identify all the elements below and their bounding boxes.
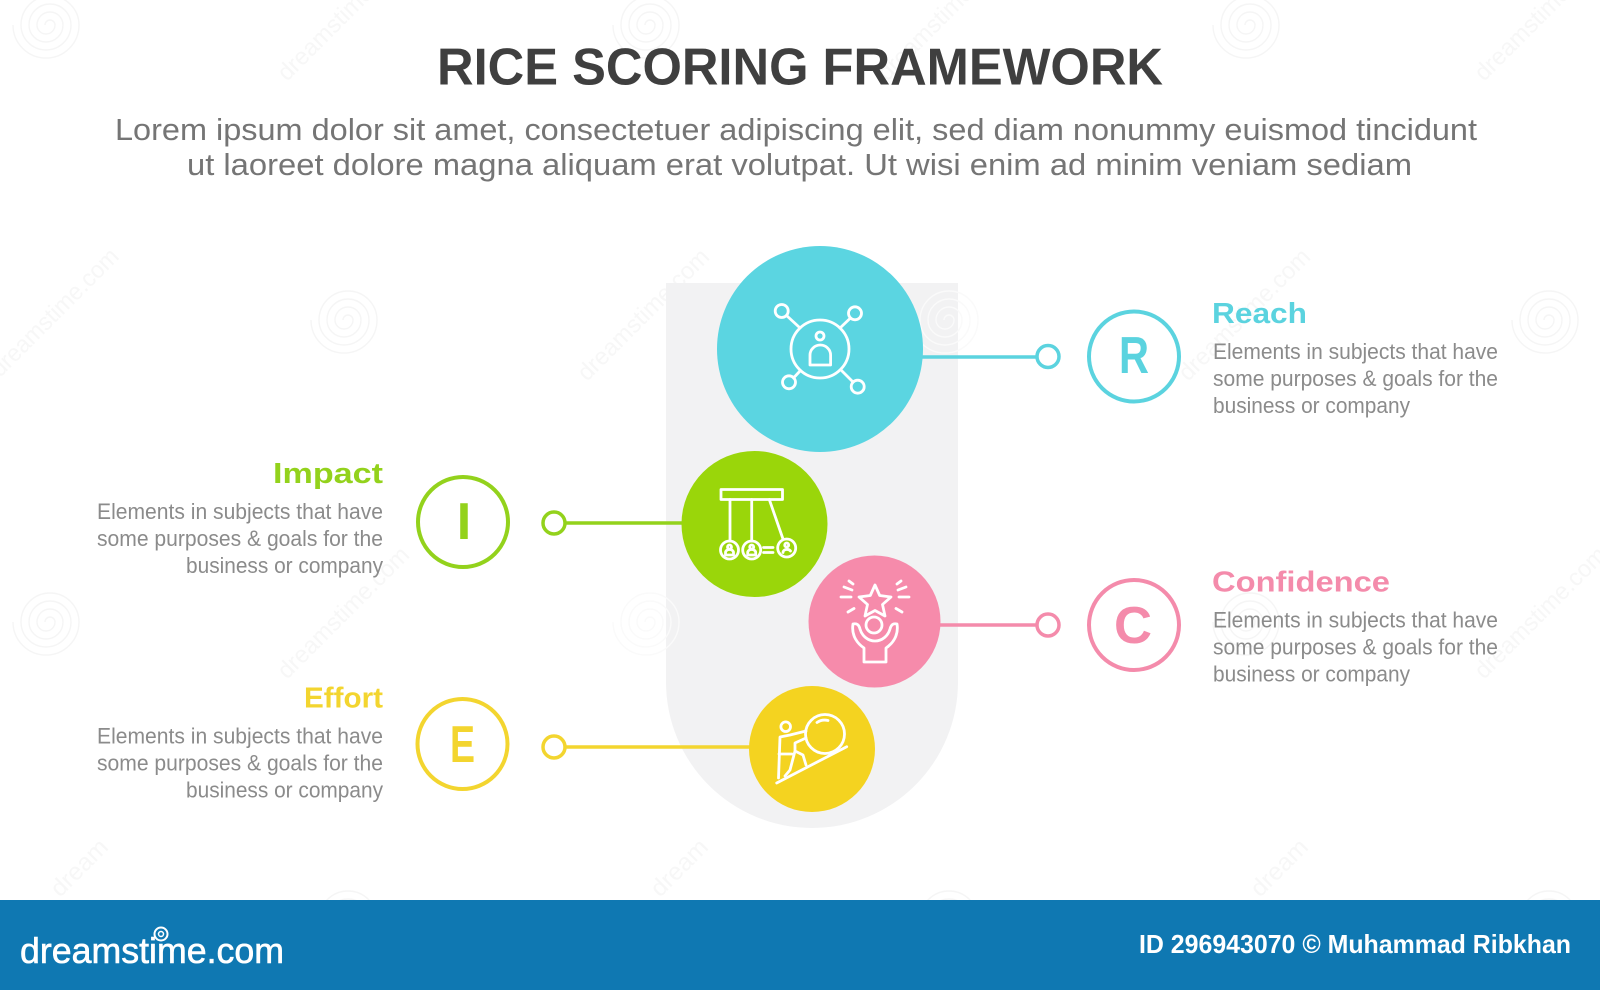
description: Effort: Elements in subjects that have [97,724,383,748]
block: impact [97,458,508,578]
description: Reach: some purposes & goals for the [1213,366,1498,391]
description: Reach: Elements in subjects that have [1213,339,1498,364]
description: Reach [1213,339,1498,418]
subtitle text: Lorem ipsum dolor sit amet, consectetuer adipiscing elit, sed diam nonummy euismod tincidunt [115,112,1477,147]
heading: Confidence: Confidence [1212,566,1390,598]
connector: confidence [938,614,1059,636]
description: Impact: some purposes & goals for the [97,526,383,551]
description: Confidence: some purposes & goals for the [1213,634,1498,660]
text: dream [1245,834,1314,902]
icon: person network [775,304,864,393]
description: Confidence [1213,608,1498,686]
circle: confidence with star icon [808,556,940,688]
badge: C [1089,580,1179,670]
footer band [0,900,1600,990]
block: effort [97,682,508,802]
text: dreamstime.com [1173,243,1316,386]
circle: effort with boulder icon [749,686,875,812]
description: Impact: Elements in subjects that have [97,499,383,524]
text: dream [645,834,714,902]
badge: E [418,699,508,789]
description: Effort [97,724,383,802]
text: dreamstime.com [572,243,715,386]
footer credit: ID 296943070 © Muhammad Ribkhan [1139,929,1571,959]
description: Effort: business or company [186,778,383,802]
description: Effort: some purposes & goals for the [97,750,383,776]
badge: R: R [1119,327,1149,385]
subtitle text [115,112,1477,182]
badge: C: C [1114,597,1152,655]
heading: Impact: Impact [273,458,383,490]
description: Confidence: Elements in subjects that have [1213,608,1498,632]
badge: R [1089,312,1179,402]
subtitle text: ut laoreet dolore magna aliquam erat volutpat. Ut wisi enim ad minim veniam sediam [187,147,1412,182]
block: reach [1089,298,1498,418]
circle: reach with network icon [717,246,923,452]
description: Impact: business or company [186,553,383,578]
icon: newton cradle [720,490,796,559]
circle: impact with pendulum icon [682,451,828,597]
connector: impact [543,512,686,534]
footer logo: dreamstime.com [20,930,284,971]
description: Reach: business or company [1213,393,1410,418]
icon: hands raising star [841,581,909,662]
connector: reach [920,346,1059,368]
description: Impact [97,499,383,578]
panel: central grey capsule [666,283,958,828]
text: dreamstime.com [272,541,415,684]
badge: I: I [457,493,471,551]
description: Confidence: business or company [1213,662,1410,686]
connector: effort [543,736,752,758]
icon: person pushing boulder [777,714,847,783]
heading: Reach: Reach [1212,298,1307,330]
block: confidence [1089,566,1498,686]
heading: Effort: Effort [304,682,383,714]
badge: I [418,477,508,567]
badge: E: E [450,716,475,774]
text: dream [45,834,114,902]
title: RICE SCORING FRAMEWORK [437,38,1163,96]
